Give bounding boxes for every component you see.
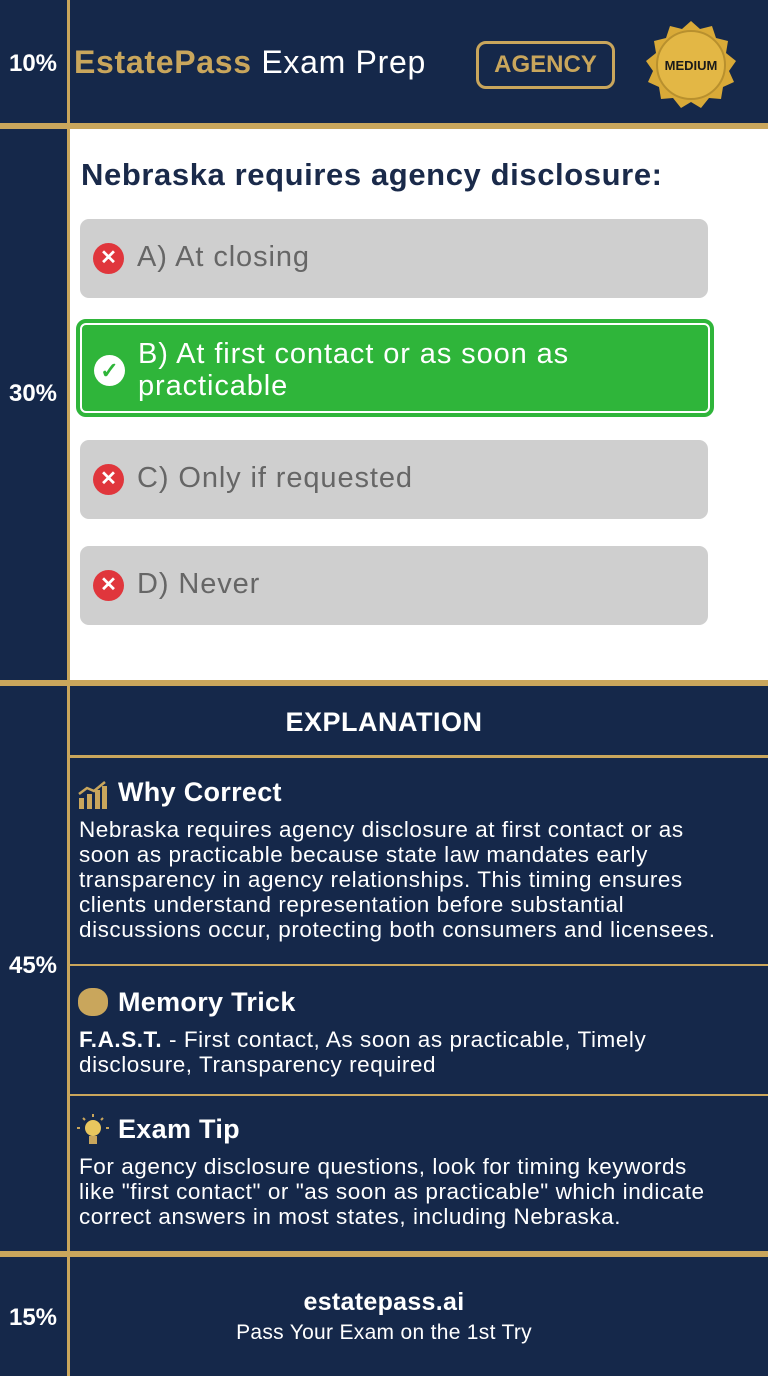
option C: C) Only if requested <box>137 462 413 494</box>
option D <box>80 546 708 625</box>
text: why correct: soon as practicable because state law mandates early <box>79 842 648 867</box>
question panel <box>70 129 768 680</box>
badge: agency: AGENCY <box>494 51 597 78</box>
label: 30%: 30% <box>9 380 57 407</box>
text: memory trick: F.A.S.T. - First contact, As soon as practicable, Timely <box>79 1027 646 1052</box>
text: why correct: Nebraska requires agency disclosure at first contact or as <box>79 817 684 842</box>
footer <box>236 1288 532 1344</box>
brand title: EstatePass Exam Prep <box>74 44 426 80</box>
question: Nebraska requires agency disclosure: <box>81 157 663 192</box>
badge: agency <box>476 41 615 89</box>
text: exam tip <box>79 1154 705 1229</box>
heading: exam tip: Exam Tip <box>118 1114 240 1144</box>
label: 10%: 10% <box>9 50 57 77</box>
text: why correct <box>79 817 716 942</box>
left column divider <box>67 0 70 1376</box>
text: memory trick: disclosure, Transparency required <box>79 1052 436 1077</box>
option B correct: practicable <box>138 370 288 402</box>
label: 15%: 15% <box>9 1304 57 1331</box>
icon: check: ✓ <box>100 358 119 383</box>
label: 45%: 45% <box>9 952 57 979</box>
footer: Pass Your Exam on the 1st Try <box>236 1321 532 1344</box>
text: exam tip: like "first contact" or "as soon as practicable" which indicate <box>79 1179 705 1204</box>
option B correct <box>76 319 714 417</box>
option A: A) At closing <box>137 241 310 273</box>
option A <box>80 219 708 298</box>
badge: medium seal: MEDIUM <box>665 58 717 73</box>
icon: brain <box>78 988 108 1016</box>
option B correct: B) At first contact or as soon as <box>138 338 569 370</box>
text: why correct: transparency in agency relationships. This timing ensures <box>79 867 683 892</box>
text: memory trick <box>79 1027 646 1077</box>
explanation heading: EXPLANATION <box>285 707 482 737</box>
icon: check <box>94 355 125 386</box>
icon: bulb <box>77 1114 109 1144</box>
icon: chart <box>78 781 107 809</box>
heading: why correct: Why Correct <box>118 777 282 807</box>
option D: ✕ <box>100 574 117 596</box>
text: why correct: clients understand representation before substantial <box>79 892 624 917</box>
text: why correct: discussions occur, protecting both consumers and licensees. <box>79 917 716 942</box>
badge: medium seal <box>646 21 736 108</box>
option A: ✕ <box>100 247 117 269</box>
footer: estatepass.ai <box>304 1288 464 1316</box>
text: exam tip: For agency disclosure questions, look for timing keywords <box>79 1154 687 1179</box>
option C <box>80 440 708 519</box>
header <box>9 21 736 108</box>
option D: D) Never <box>137 568 260 600</box>
text: exam tip: correct answers in most states, including Nebraska. <box>79 1204 621 1229</box>
heading: memory trick: Memory Trick <box>118 987 296 1017</box>
option C: ✕ <box>100 468 117 490</box>
